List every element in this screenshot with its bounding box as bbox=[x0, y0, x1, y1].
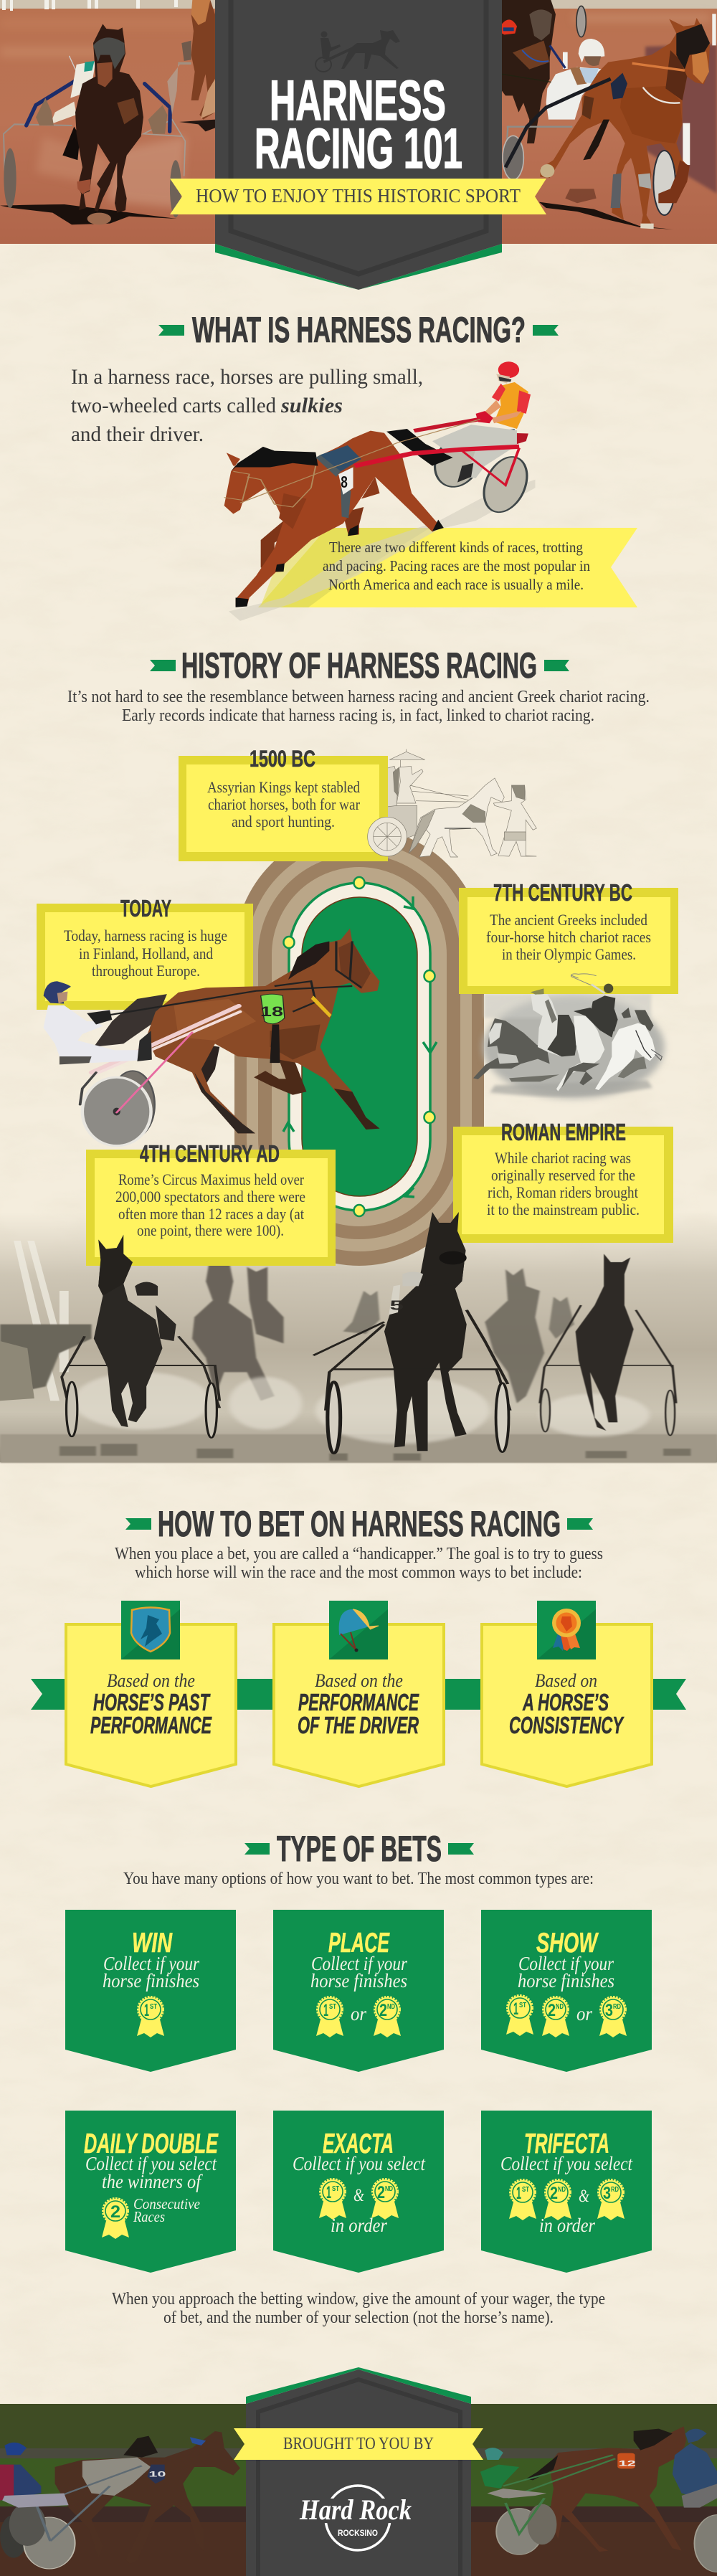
ribbon badge 1st: 1 bbox=[513, 1999, 518, 2019]
subtitle ribbon: HOW TO ENJOY THIS HISTORIC SPORT bbox=[196, 185, 521, 207]
kinds of races text: There are two different kinds of races, trotting bbox=[329, 539, 583, 556]
far legs bbox=[192, 1043, 219, 1092]
mane bbox=[288, 941, 329, 980]
timeline card: Roman Empire: it to the mainstream public. bbox=[487, 1201, 640, 1218]
banner inner outline bbox=[231, 0, 486, 274]
driver bbox=[44, 1005, 151, 1063]
ribbon badge 1st bbox=[509, 2180, 536, 2220]
bet card: trifecta: in order bbox=[539, 2215, 595, 2236]
bet card: exacta: in order bbox=[331, 2215, 387, 2236]
bet method card: driver: OF THE DRIVER bbox=[298, 1712, 419, 1738]
timeline card: today: throughout Europe. bbox=[92, 962, 200, 980]
timeline card: 7th century BC bbox=[459, 879, 678, 994]
footer banner inner outline bbox=[258, 2380, 460, 2576]
parasol bbox=[389, 752, 425, 759]
bet card: show bbox=[481, 1910, 652, 2072]
right horse and sulky bbox=[480, 2426, 717, 2572]
timeline card: 1500 BC: chariot horses, both for war bbox=[208, 795, 361, 813]
driver bbox=[590, 995, 618, 1031]
harness bbox=[110, 941, 361, 1015]
timeline card: 1500 BC: and sport hunting. bbox=[232, 813, 335, 830]
bet card: show: SHOW bbox=[536, 1928, 599, 1959]
bet card: exacta: & bbox=[353, 2186, 364, 2205]
driver legs bbox=[432, 425, 517, 478]
bet card: place bbox=[273, 1910, 444, 2072]
shadows bbox=[229, 480, 535, 621]
left horse and sulky bbox=[0, 2431, 240, 2569]
bet card: trifecta bbox=[481, 2111, 652, 2273]
ribbon badge 1st bbox=[506, 1996, 533, 2036]
Hard Rock Rocksino logo: ROCKSINO bbox=[338, 2528, 378, 2538]
sponsor ribbon: BROUGHT TO YOU BY bbox=[283, 2435, 434, 2453]
bet card: daily double: Collect if you select bbox=[85, 2153, 217, 2174]
horse 3: white centre bbox=[556, 1016, 604, 1092]
ribbon badge 1st bbox=[316, 1997, 343, 2037]
Hard Rock Rocksino logo bbox=[299, 2486, 412, 2550]
ribbon: kinds of races bbox=[258, 528, 637, 607]
horse far legs bbox=[261, 521, 298, 572]
footer banner green trim bbox=[246, 2367, 471, 2404]
bet card: trifecta: TRIFECTA bbox=[524, 2128, 609, 2159]
far wheel bbox=[110, 1071, 155, 1138]
pole bbox=[410, 785, 485, 805]
timeline card: 4th century AD: 200,000 spectators and there were bbox=[115, 1188, 305, 1206]
track line with arrows bbox=[283, 883, 437, 1211]
ribbon badge 1st: 1 bbox=[323, 2001, 328, 2020]
bet card: trifecta: & bbox=[579, 2187, 589, 2206]
ribbon badge 3rd: 3 bbox=[603, 2184, 611, 2203]
ribbon badge 2nd: ND bbox=[556, 2003, 564, 2011]
bet method card: consistency: Based on bbox=[535, 1670, 597, 1691]
bet card: place: or bbox=[351, 2003, 366, 2025]
bet method card: driver: PERFORMANCE bbox=[298, 1689, 419, 1715]
timeline card: Roman Empire: ROMAN EMPIRE bbox=[501, 1119, 626, 1145]
bet card: show: or bbox=[576, 2003, 592, 2025]
bet card: exacta: Collect if you select bbox=[293, 2153, 426, 2174]
poles and stands bbox=[14, 1241, 69, 1401]
left horse bbox=[62, 1235, 219, 1438]
hooves bbox=[236, 597, 248, 607]
kinds of races text: and pacing. Pacing races are the most popular in bbox=[323, 557, 590, 574]
bet card: show: horse finishes bbox=[518, 1970, 614, 1992]
ribbon badge 1st: ST bbox=[522, 2186, 529, 2194]
history intro text: Early records indicate that harness racing is, in fact, linked to chariot racing. bbox=[122, 706, 594, 725]
intro text: two-wheeled carts called bbox=[71, 394, 276, 417]
ribbon badge 1st: ST bbox=[329, 2003, 336, 2011]
banner body bbox=[215, 0, 502, 290]
icon: shield with horse bbox=[121, 1601, 180, 1659]
history track bbox=[234, 828, 484, 1266]
title text: HARNESS bbox=[270, 68, 446, 132]
bet card: daily double: the winners of bbox=[102, 2171, 203, 2192]
number 18 plate bbox=[261, 994, 285, 1024]
engraving: Assyrian chariot scene bbox=[386, 749, 536, 857]
main shaft bbox=[354, 447, 519, 466]
bet method card: driver: Based on the bbox=[315, 1670, 403, 1691]
timeline card: 4th century AD: Rome’s Circus Maximus held over bbox=[118, 1170, 305, 1188]
sepia horse heads over cards bbox=[98, 1212, 467, 1296]
timeline card: 7th century BC: in their Olympic Games. bbox=[502, 945, 636, 963]
ribbon badge 2nd: ND bbox=[385, 2185, 393, 2193]
ribbon badge 2 bbox=[102, 2199, 129, 2239]
water bbox=[0, 1434, 717, 1463]
how to bet intro text: which horse will win the race and the most common ways to bet include: bbox=[135, 1563, 582, 1582]
ribbon badge 2nd bbox=[542, 1997, 569, 2037]
ribbon badge 2: 2 bbox=[110, 2202, 120, 2222]
horse body bbox=[224, 431, 442, 607]
closing text: When you approach the betting window, give the amount of your wager, the type bbox=[112, 2290, 605, 2309]
left wheel bbox=[430, 435, 485, 488]
ribbon badge 3rd bbox=[597, 2180, 625, 2220]
left horse and sulky: 10 bbox=[148, 2469, 166, 2478]
bet method card: past performance: PERFORMANCE bbox=[90, 1712, 212, 1738]
ribbon badge 1st: ST bbox=[332, 2185, 339, 2193]
ribbon badge 3rd: 3 bbox=[605, 2001, 613, 2020]
illustration: horse, sulky and driver bbox=[224, 361, 535, 621]
tail bbox=[94, 994, 167, 1047]
blanket and girth bbox=[320, 445, 361, 473]
track markers bbox=[284, 877, 435, 1216]
history intro text bbox=[67, 688, 650, 725]
driver helmet bbox=[498, 361, 519, 378]
subtitle ribbon bbox=[170, 179, 546, 214]
ribbon badge 2nd bbox=[374, 1997, 401, 2037]
ribbon badge 1st: 1 bbox=[516, 2184, 521, 2203]
bet card: exacta bbox=[273, 2111, 444, 2273]
bet card: exacta: EXACTA bbox=[323, 2128, 394, 2159]
footer banner bbox=[246, 2367, 471, 2576]
background horses bbox=[622, 1008, 631, 1018]
sponsor ribbon bbox=[234, 2428, 483, 2460]
bet method card: past performance: HORSE’S PAST bbox=[93, 1689, 211, 1715]
horse 1: dark left bbox=[473, 1018, 550, 1079]
horse 4: white front bbox=[595, 1023, 656, 1090]
timeline card: 1500 BC bbox=[179, 746, 388, 861]
bet method card: past performance: Based on the bbox=[107, 1670, 195, 1691]
timeline card: 1500 BC: Assyrian Kings kept stabled bbox=[207, 778, 360, 796]
icon: harness horse silhouette bbox=[315, 30, 400, 72]
kinds of races text: North America and each race is usually a mile. bbox=[328, 576, 584, 593]
title text: RACING 101 bbox=[255, 116, 462, 180]
timeline card: Roman Empire: While chariot racing was bbox=[495, 1149, 631, 1167]
ribbon badge 3rd: RD bbox=[611, 2186, 619, 2194]
bet method card: driver bbox=[274, 1601, 444, 1786]
ribbon badge 2nd: 2 bbox=[377, 2183, 385, 2202]
bet card: daily double bbox=[65, 2111, 236, 2273]
intro text bbox=[71, 365, 423, 446]
bet card: win bbox=[65, 1910, 236, 2072]
heading: type of bets: TYPE OF BETS bbox=[277, 1829, 442, 1869]
timeline card: 4th century AD: often more than 12 races a day (at bbox=[118, 1205, 304, 1223]
closing text: of bet, and the number of your selection (not the horse’s name). bbox=[163, 2309, 554, 2327]
timeline card: 7th century BC: The ancient Greeks included bbox=[490, 911, 647, 929]
right racing horses bbox=[502, 0, 716, 229]
history intro text: It’s not hard to see the resemblance between harness racing and ancient Greek chariot racing. bbox=[67, 688, 650, 706]
footer banner body bbox=[246, 2369, 471, 2576]
centre horse: 5 bbox=[390, 1298, 404, 1313]
bet card: daily double: Races bbox=[133, 2208, 165, 2225]
title text bbox=[255, 68, 462, 180]
right horse and sulky: 12 bbox=[619, 2458, 636, 2468]
chariot body bbox=[386, 805, 417, 838]
bet card: daily double: DAILY DOUBLE bbox=[84, 2128, 219, 2159]
charioteers bbox=[386, 766, 398, 807]
photo: footer racers bbox=[0, 2404, 717, 2576]
heading: what is harness racing: WHAT IS HARNESS RACING? bbox=[192, 310, 526, 350]
track infield bbox=[302, 897, 417, 1196]
sepia race photo bbox=[0, 1212, 717, 1463]
timeline card: today bbox=[37, 895, 253, 1010]
heading: what is harness racing bbox=[158, 310, 559, 350]
photo: modern horse number 18 with sulky: 18 bbox=[260, 1003, 283, 1019]
upper shaft bbox=[414, 419, 483, 431]
tail bbox=[386, 429, 453, 466]
ribbon badge 2nd: 2 bbox=[550, 2184, 558, 2203]
timeline card: 4th century AD: 4TH CENTURY AD bbox=[140, 1140, 280, 1167]
closing text bbox=[112, 2290, 605, 2327]
driver torso bbox=[494, 382, 528, 429]
timeline card: 1500 BC: 1500 BC bbox=[250, 746, 315, 772]
how to bet intro text bbox=[115, 1545, 603, 1582]
reins and bridle bbox=[224, 420, 480, 507]
banner green trim bbox=[215, 244, 502, 290]
horse bbox=[409, 778, 504, 857]
bet card: daily double: Consecutive bbox=[133, 2195, 200, 2212]
right horse bbox=[540, 1254, 676, 1436]
ribbon badge 2nd: 2 bbox=[379, 2001, 387, 2020]
spray bbox=[73, 1372, 650, 1444]
timeline card: today: in Finland, Holland, and bbox=[79, 944, 213, 962]
bet card: trifecta: Collect if you select bbox=[500, 2153, 633, 2174]
title banner bbox=[215, 0, 502, 290]
intro text: In a harness race, horses are pulling small, bbox=[71, 365, 423, 389]
illustration: horse, sulky and driver: 8 bbox=[341, 474, 348, 492]
icon: award rosette bbox=[537, 1601, 596, 1659]
photo: header harness racers bbox=[0, 0, 717, 244]
left racing horse and sulky bbox=[0, 24, 185, 224]
ribbon badge 2nd: ND bbox=[387, 2003, 395, 2011]
ribbon badge 3rd bbox=[599, 1997, 627, 2037]
timeline card: 7th century BC: four-horse hitch chariot races bbox=[486, 928, 651, 946]
number tag bbox=[338, 468, 353, 495]
ribbon badge 1st: 1 bbox=[326, 2183, 331, 2202]
shafts bbox=[80, 1006, 240, 1112]
bet card: place: PLACE bbox=[328, 1928, 390, 1959]
ribbon badge 1st: ST bbox=[150, 2003, 157, 2011]
ribbon badge 1st bbox=[137, 1997, 164, 2037]
seat bbox=[501, 433, 528, 446]
ribbon badge 2nd: 2 bbox=[548, 2001, 556, 2020]
bet card: win: WIN bbox=[132, 1928, 173, 1959]
type of bets intro text: You have many options of how you want to bet. The most common types are: bbox=[123, 1870, 594, 1888]
how to bet intro text: When you place a bet, you are called a “handicapper.” The goal is to try to guess bbox=[115, 1545, 603, 1563]
photo: modern horse number 18 with sulky bbox=[44, 929, 380, 1146]
engraving whip and driver detail bbox=[531, 974, 613, 995]
bet card: place: Collect if your bbox=[311, 1953, 407, 1974]
bet card: win: Collect if your bbox=[103, 1953, 199, 1974]
Hard Rock Rocksino logo: Hard Rock bbox=[299, 2494, 412, 2526]
timeline card: 4th century AD: one point, there were 100). bbox=[137, 1221, 284, 1239]
timeline card: today: Today, harness racing is huge bbox=[64, 927, 227, 944]
bet method card: consistency: CONSISTENCY bbox=[509, 1712, 625, 1738]
intro text: sulkies bbox=[280, 394, 343, 417]
background horses bbox=[192, 1260, 574, 1403]
heading: history of harness racing bbox=[150, 645, 569, 686]
intro text: and their driver. bbox=[71, 422, 204, 446]
centre horse bbox=[313, 1212, 510, 1454]
timeline card: Roman Empire: rich, Roman riders brought bbox=[488, 1183, 638, 1201]
timeline card: 4th century AD bbox=[86, 1140, 336, 1266]
bet card: win: horse finishes bbox=[103, 1970, 199, 1992]
bet card: show: Collect if your bbox=[518, 1953, 614, 1974]
timeline card: today: TODAY bbox=[120, 895, 171, 922]
ribbon badge 1st: 1 bbox=[144, 2001, 149, 2020]
second horse behind left bbox=[167, 0, 215, 131]
ribbon badge 3rd: RD bbox=[613, 2003, 621, 2011]
bet method card: consistency: A HORSE’S bbox=[522, 1689, 609, 1715]
attendant bbox=[493, 785, 536, 856]
ribbon badge 2nd bbox=[371, 2179, 399, 2220]
green ribbon band bbox=[31, 1679, 686, 1710]
bet card: place: horse finishes bbox=[310, 1970, 407, 1992]
horse 2: pale with dark body bbox=[531, 988, 579, 1056]
kinds of races text bbox=[323, 539, 590, 593]
right wheel bbox=[478, 455, 533, 514]
icon: driver helmet bbox=[329, 1601, 388, 1659]
timeline card: Roman Empire bbox=[453, 1119, 673, 1243]
ribbon badge 1st bbox=[319, 2179, 346, 2220]
ribbon badge 1st: ST bbox=[519, 2002, 526, 2009]
bet method card: consistency bbox=[482, 1601, 652, 1786]
bet method card: past performance bbox=[66, 1601, 236, 1786]
timeline card: Roman Empire: originally reserved for the bbox=[491, 1166, 635, 1184]
mane bbox=[231, 447, 318, 471]
engraving: Greek chariot scene bbox=[473, 988, 665, 1099]
ribbon badge 2nd bbox=[544, 2180, 571, 2220]
near wheel bbox=[82, 1077, 151, 1146]
horse body bbox=[146, 929, 380, 1133]
timeline card: 7th century BC: 7TH CENTURY BC bbox=[493, 879, 632, 906]
left sulky bbox=[62, 1336, 219, 1408]
ribbon badge 2nd: ND bbox=[558, 2186, 566, 2194]
heading: type of bets bbox=[244, 1829, 474, 1869]
chariot wheel overlay bbox=[368, 817, 407, 856]
